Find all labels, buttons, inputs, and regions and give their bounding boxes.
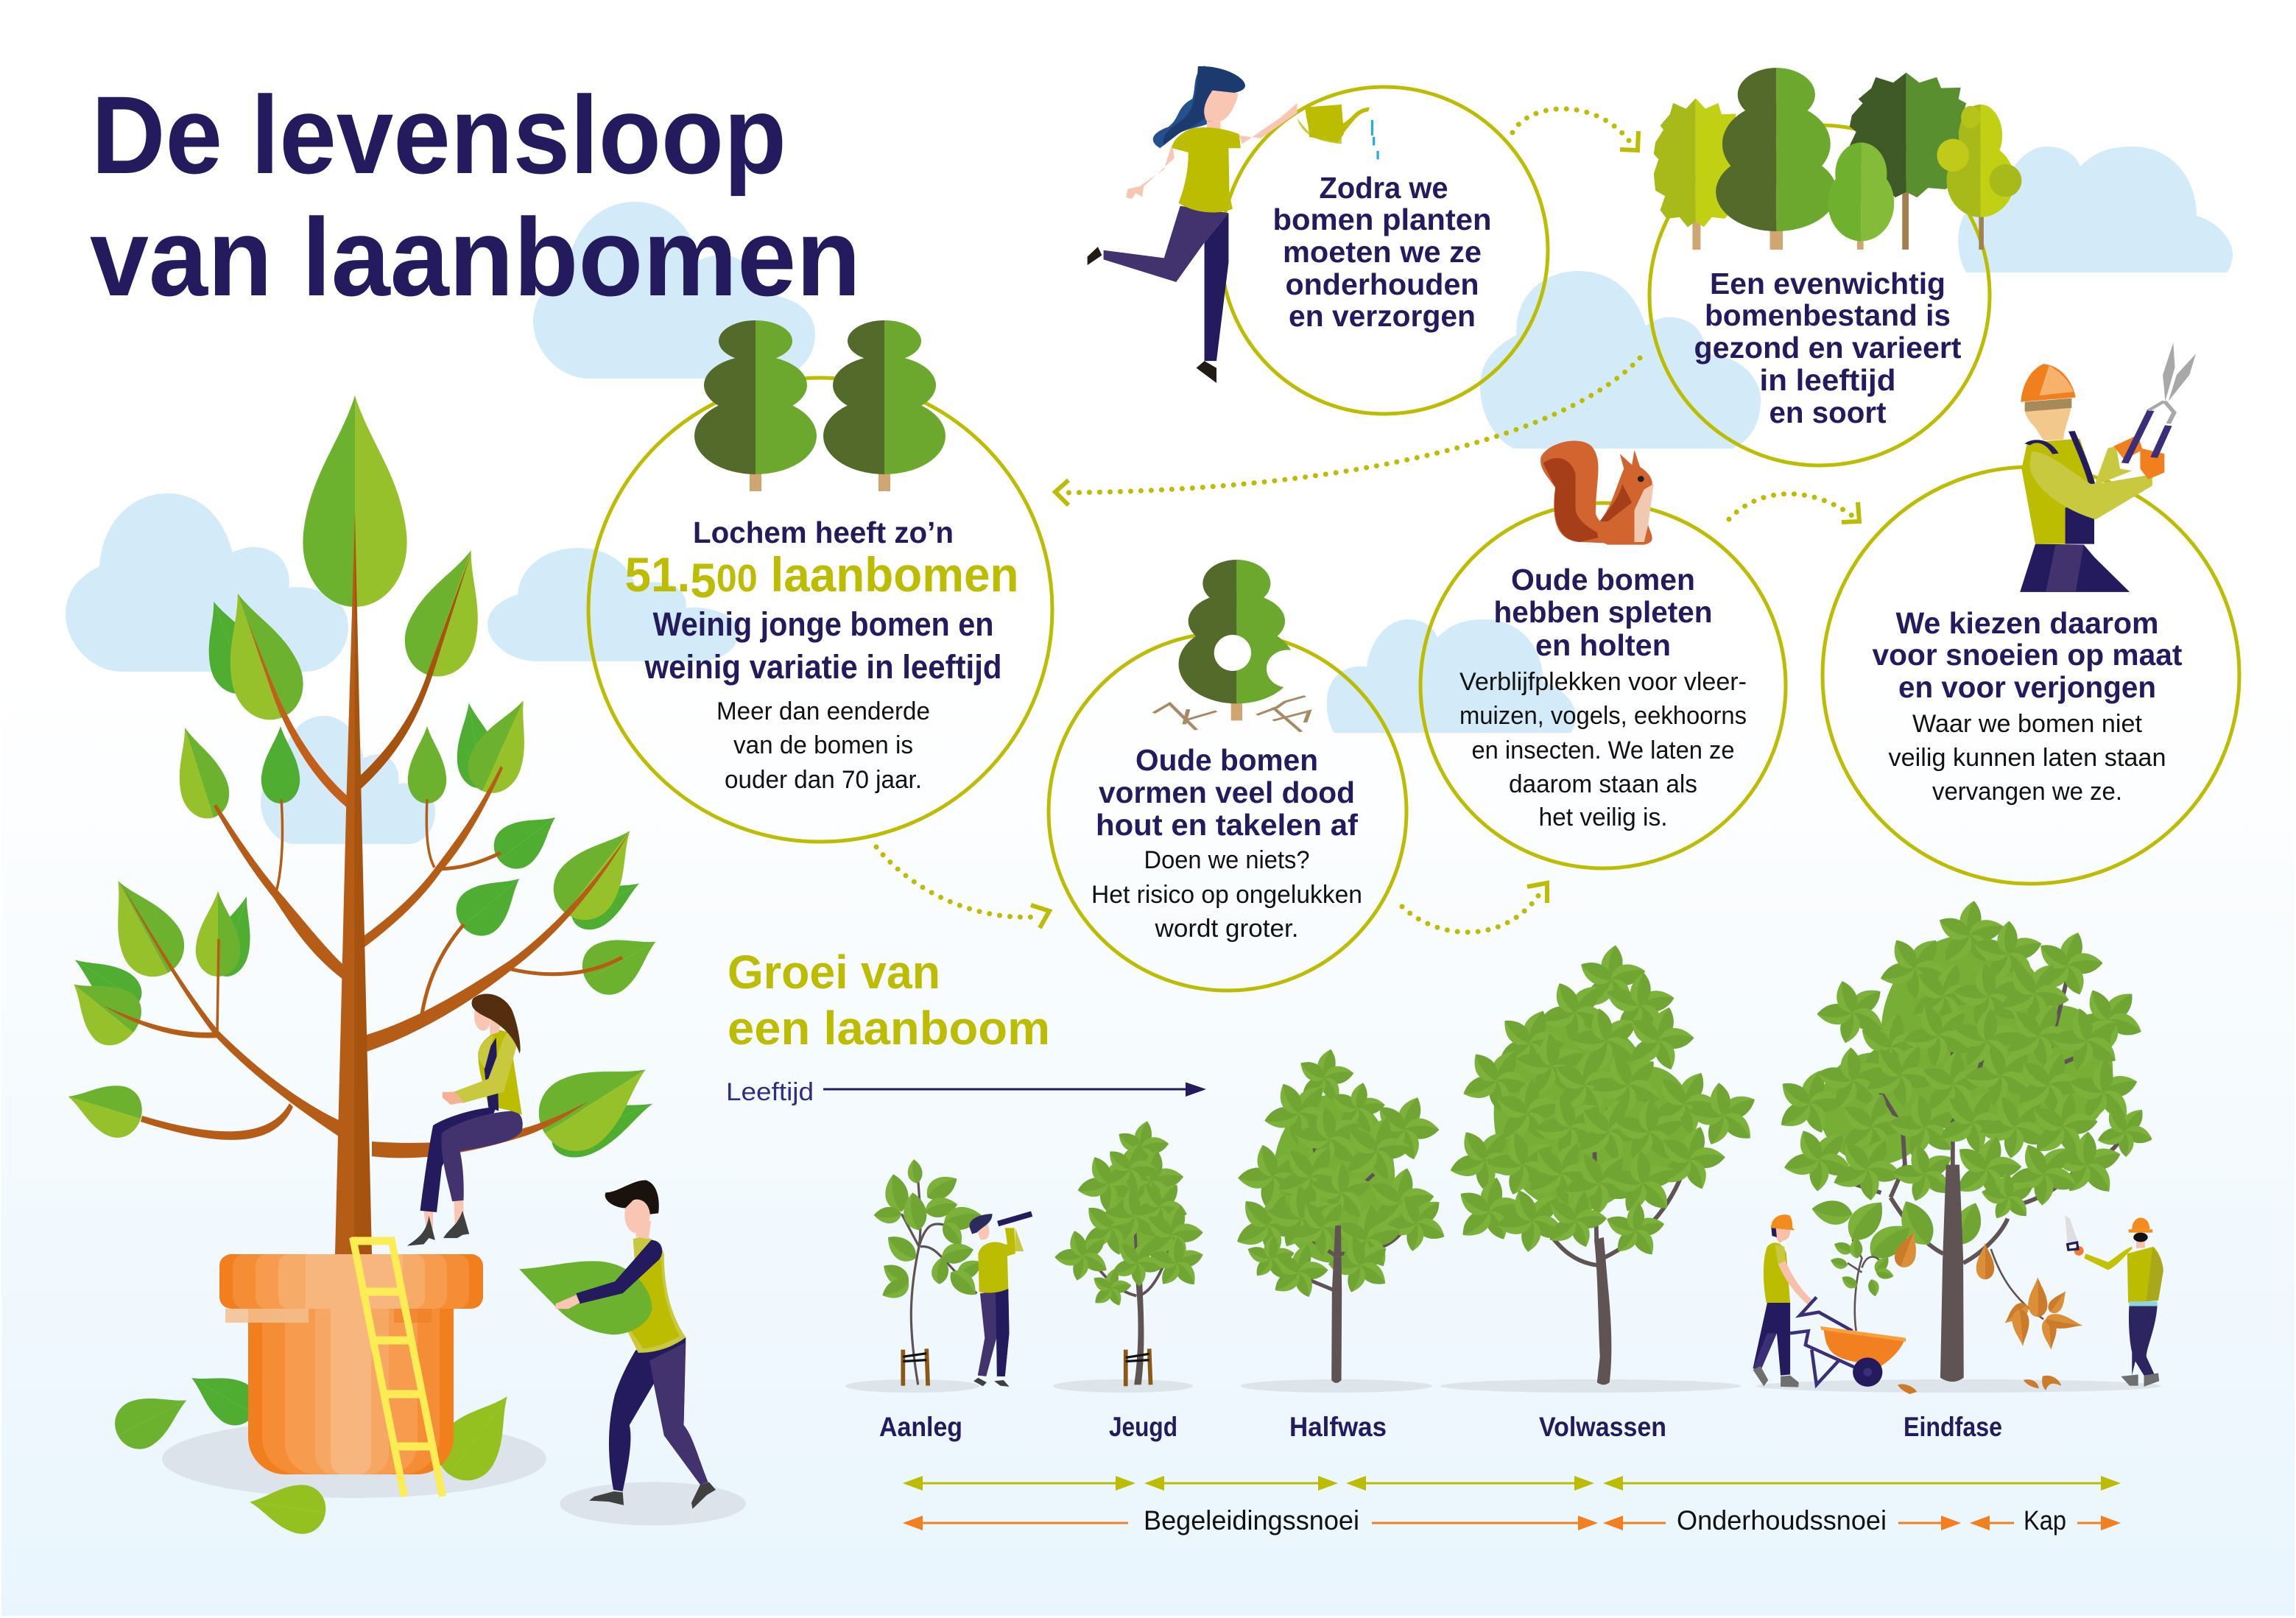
body text [716, 697, 930, 794]
heading and number: 00 [716, 557, 758, 600]
body text: ouder dan 70 jaar. [725, 766, 922, 794]
flower pot [219, 1254, 483, 1474]
age arrow [726, 1078, 1206, 1106]
circle: pruning and rejuvenation [1823, 342, 2239, 884]
circle outline [1649, 125, 1990, 465]
text: gezond en varieert [1694, 331, 1962, 365]
text: bomenbestand is [1705, 298, 1951, 332]
clouds [66, 147, 2233, 844]
growth heading: een laanboom [728, 1002, 1050, 1055]
labels: Kap [2024, 1505, 2066, 1536]
tree trunk [1940, 1164, 1964, 1382]
text [1459, 563, 1747, 831]
text: Oude bomen [1511, 563, 1695, 597]
tree branches [103, 552, 630, 1158]
heading and number: 5 [690, 553, 716, 608]
withered orange leaves [1892, 1228, 2084, 1394]
dotted arrow: Lochem to dead wood [876, 847, 1049, 928]
circle outline [1823, 467, 2239, 884]
ground shadow of pot [162, 1420, 546, 1498]
olive range arrows [903, 1476, 2121, 1491]
ground shadows for growth stages [845, 1379, 2161, 1393]
woman with watering can [1088, 66, 1378, 383]
text: in leeftijd [1760, 363, 1895, 397]
dotted arrow: watering to diverse trees [1513, 109, 1638, 150]
title [90, 73, 861, 319]
icon: squirrel [1540, 441, 1654, 545]
heading and number [624, 516, 1019, 686]
stage labels: Aanleg [879, 1412, 962, 1442]
small sapling [1829, 1237, 1895, 1331]
circle: planting and care [1221, 87, 1548, 414]
text [1091, 743, 1362, 943]
sitting woman [407, 993, 523, 1246]
text: en soort [1769, 395, 1887, 429]
icon: group of varied trees [1654, 68, 2021, 250]
dotted arrow: diverse trees to Lochem [1055, 358, 1640, 505]
big potted tree with figures [55, 395, 746, 1537]
icon: two trees [694, 320, 945, 491]
tree leaves [55, 395, 669, 1537]
yellow ladder [351, 1237, 443, 1496]
stage: Eindfase tree with workers [1753, 898, 2165, 1394]
text: Waar we bomen niet [1912, 710, 2143, 738]
text: vervangen we ze. [1932, 778, 2122, 806]
text: vormen veel dood [1099, 775, 1355, 809]
heading and number: laanbomen [771, 547, 1027, 602]
text: bomen planten [1272, 203, 1492, 236]
tree branches [1834, 977, 2119, 1263]
text: Oude bomen [1135, 743, 1318, 777]
title: van laanbomen [90, 195, 861, 319]
text: Doen we niets? [1144, 846, 1309, 874]
text: Zodra we [1320, 171, 1448, 205]
stage: Jeugd tree [1043, 1116, 1213, 1386]
heading and number: Weinig jonge bomen en [652, 605, 994, 643]
text: hout en takelen af [1096, 808, 1358, 842]
age arrow: Leeftijd [726, 1078, 814, 1106]
circle: cracks and hollows [1420, 441, 1786, 868]
labels [1144, 1505, 2066, 1536]
text: Een evenwichtig [1710, 267, 1945, 300]
text: hebben spleten [1493, 595, 1713, 629]
heading and number: weinig variatie in leeftijd [644, 648, 1001, 686]
icon: tree with holes and dead branches [1154, 560, 1309, 732]
man with telescope [970, 1214, 1032, 1387]
dotted arrow: hollows to pruning [1729, 494, 1859, 522]
body text: van de bomen is [733, 731, 913, 759]
worker with wheelbarrow [1753, 1214, 1906, 1387]
stage labels: Halfwas [1289, 1412, 1387, 1442]
tree foliage [1767, 898, 2165, 1267]
stage labels: Jeugd [1109, 1412, 1177, 1442]
circle outline [1049, 633, 1406, 991]
heading and number: 51. [624, 547, 692, 602]
man carrying leaf [519, 1180, 746, 1525]
text: onderhouden [1286, 267, 1479, 301]
text: en voor verjongen [1898, 670, 2156, 704]
stage: Volwassen tree [1435, 942, 1772, 1385]
body text: Meer dan eenderde [716, 697, 930, 725]
heading and number: Lochem heeft zo’n [693, 516, 954, 549]
growth heading [728, 946, 1050, 1055]
worker with saw [2065, 1215, 2163, 1387]
text: en holten [1535, 628, 1671, 662]
text: muizen, vogels, eekhoorns [1459, 702, 1747, 730]
circle: dead wood [1049, 560, 1406, 991]
circle outline [1420, 503, 1786, 868]
stage labels: Eindfase [1904, 1412, 2002, 1442]
circle outline [1221, 87, 1548, 414]
arrow lines [903, 1516, 2121, 1530]
circle: balanced tree stock [1649, 125, 1990, 465]
text: het veilig is. [1539, 803, 1667, 831]
text: voor snoeien op maat [1872, 638, 2183, 672]
text: en verzorgen [1289, 299, 1476, 333]
text: en insecten. We laten ze [1471, 736, 1735, 764]
icon: worker with pruning shears [2020, 342, 2196, 592]
text: moeten we ze [1283, 235, 1482, 269]
text [1272, 171, 1492, 333]
labels: Begeleidingssnoei [1144, 1505, 1359, 1536]
text: Het risico op ongelukken [1091, 881, 1362, 909]
circle outline [588, 378, 1052, 842]
stage: Aanleg sapling with man [873, 1158, 1032, 1387]
text: Verblijfplekken voor vleer- [1459, 668, 1747, 696]
tree trunk [335, 512, 372, 1254]
text: We kiezen daarom [1895, 606, 2159, 640]
circle: Lochem statistics [588, 320, 1052, 842]
text: veilig kunnen laten staan [1888, 744, 2166, 772]
tree canopy base [1819, 935, 2113, 1164]
dotted arrow: dead wood to hollows [1402, 883, 1547, 932]
growth heading: Groei van [728, 946, 940, 999]
title: De levensloop [91, 73, 786, 197]
stage labels: Volwassen [1539, 1412, 1666, 1442]
sapling [873, 1158, 985, 1386]
text [1694, 267, 1962, 429]
stage labels [879, 1412, 2002, 1442]
text [1872, 606, 2183, 806]
orange pruning arrows with labels [903, 1505, 2121, 1536]
text: daarom staan als [1509, 770, 1697, 798]
labels: Onderhoudssnoei [1677, 1505, 1887, 1536]
text: wordt groter. [1154, 915, 1299, 943]
stage: Halfwas tree [1222, 1044, 1461, 1383]
